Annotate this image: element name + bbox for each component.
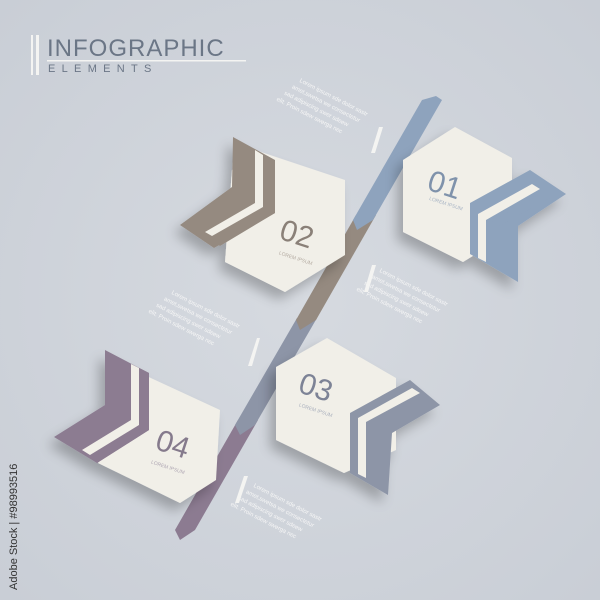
card 03 bbox=[276, 338, 440, 495]
text block 2: amet,swetsa we consectetur bbox=[371, 274, 441, 314]
text block 1: amet,swetsa we consectetur bbox=[291, 84, 361, 124]
card 01 bbox=[403, 127, 566, 282]
bar 4 bbox=[235, 476, 248, 503]
text block 4: amet,swetsa we consectetur bbox=[245, 489, 315, 529]
card 03: LOREM IPSUM bbox=[298, 402, 333, 419]
number 02: 02 bbox=[276, 214, 318, 255]
card 01: LOREM IPSUM bbox=[428, 196, 463, 212]
text block 1 bbox=[275, 73, 368, 142]
number 03: 03 bbox=[295, 367, 337, 409]
text block 4: sad adipiscing swer sdeew bbox=[237, 496, 304, 534]
number 04: 04 bbox=[152, 424, 194, 466]
card 04: LOREM IPSUM bbox=[150, 460, 185, 476]
watermark id: Adobe Stock | #98993516 bbox=[8, 464, 20, 590]
title: ELEMENTS bbox=[48, 63, 158, 75]
text block 3: amet,swetsa we consectetur bbox=[163, 296, 233, 336]
bar 3 bbox=[248, 338, 260, 366]
chevron 03 bbox=[350, 380, 440, 495]
text block 1: Lorem ipsum sde dolor sastr bbox=[298, 78, 368, 118]
chevron 04 bbox=[54, 350, 149, 463]
number 01: 01 bbox=[424, 165, 466, 206]
text block 3: sad adipiscing swer sdeew bbox=[155, 303, 222, 341]
text block 3: elit. Proin sdew swerga nec bbox=[147, 309, 215, 347]
text block 2 bbox=[355, 263, 448, 332]
text block 4: elit. Proin sdew swerga nec bbox=[229, 502, 297, 540]
text block 2: elit. Proin sdew swerga nec bbox=[355, 287, 423, 325]
text block 2: Lorem ipsum sde dolor sastr bbox=[378, 268, 448, 308]
card 02 bbox=[180, 137, 345, 292]
text block 1: elit. Proin sdew swerga nec bbox=[275, 97, 343, 135]
card 02: LOREM IPSUM bbox=[278, 250, 313, 267]
title: INFOGRAPHIC bbox=[47, 35, 225, 62]
text block 3: Lorem ipsum sde dolor sastr bbox=[170, 290, 240, 330]
title bbox=[31, 35, 246, 75]
text block 2: sad adipiscing swer sdeew bbox=[363, 281, 430, 319]
chevron 02 bbox=[180, 137, 275, 248]
text block 4: Lorem ipsum sde dolor sastr bbox=[252, 483, 322, 523]
text block 4 bbox=[229, 478, 322, 547]
bar 2 bbox=[364, 265, 376, 292]
diagonal timeline band bbox=[175, 96, 442, 540]
bar 1 bbox=[371, 127, 383, 153]
text block 3 bbox=[147, 285, 240, 354]
text block 1: sad adipiscing swer sdeew bbox=[283, 91, 350, 129]
chevron 01 bbox=[470, 170, 566, 282]
card 04 bbox=[54, 350, 220, 503]
